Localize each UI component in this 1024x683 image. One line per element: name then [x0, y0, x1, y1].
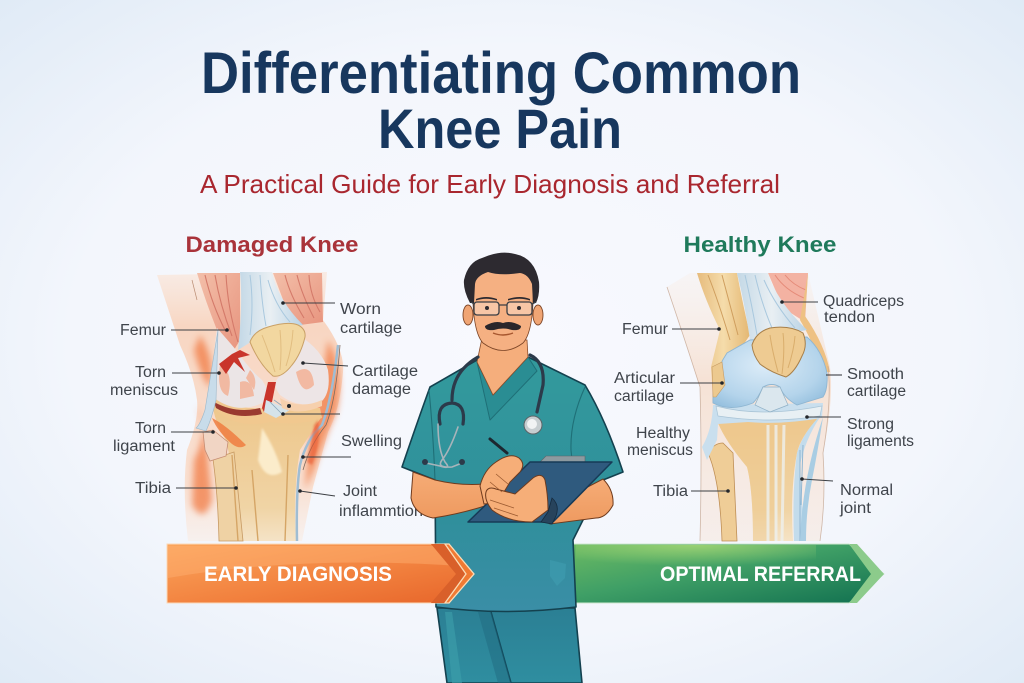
ears	[463, 305, 543, 325]
label: cartilage damage	[281, 361, 418, 416]
label: torn meniscus: meniscus	[110, 382, 178, 399]
label: tibia	[653, 483, 730, 500]
clipboard	[468, 456, 612, 522]
arrow: early diagnosis	[167, 544, 474, 603]
moustache	[485, 322, 521, 330]
label: smooth cartilage: cartilage	[847, 383, 906, 400]
label: torn ligament	[113, 420, 215, 455]
label: normal joint	[800, 477, 893, 517]
labels: damaged knee	[110, 301, 423, 520]
label: joint inflammation: inflammtion	[339, 503, 423, 520]
label: smooth cartilage	[826, 366, 906, 400]
label: joint inflammation: Joint	[343, 483, 378, 500]
pen	[490, 439, 507, 453]
label: cartilage damage: damage	[352, 381, 411, 398]
label: normal joint: Normal	[840, 482, 893, 499]
glasses	[471, 302, 536, 315]
label: healthy meniscus: meniscus	[627, 442, 693, 459]
label: worn cartilage: cartilage	[340, 320, 402, 337]
label: joint inflammation	[298, 483, 423, 520]
face	[473, 266, 533, 350]
label: swelling: Swelling	[341, 433, 402, 450]
label: articular cartilage: cartilage	[614, 388, 674, 405]
scrub top	[402, 357, 623, 612]
label: worn cartilage	[281, 301, 402, 337]
label: normal joint: joint	[839, 500, 872, 517]
holding hand	[486, 475, 548, 522]
label: femur	[120, 322, 229, 339]
label: femur: Femur	[120, 322, 166, 339]
right arm	[548, 479, 613, 524]
eyes and brows	[476, 297, 530, 310]
label: torn meniscus: Torn	[135, 364, 166, 381]
label: articular cartilage: Articular	[614, 370, 675, 387]
subtitle: A Practical Guide for Early Diagnosis and Referral	[200, 169, 780, 199]
label: healthy meniscus: Healthy	[636, 425, 690, 442]
label: femur: Femur	[622, 321, 668, 338]
left arm	[411, 472, 488, 518]
heading: healthy knee: Healthy Knee	[684, 232, 836, 257]
label: quadriceps tendon: Quadriceps	[823, 293, 904, 310]
title line 2: Knee Pain	[378, 97, 622, 160]
heading: damaged knee: Damaged Knee	[186, 232, 358, 257]
label: torn ligament: ligament	[113, 438, 176, 455]
title: Differentiating Common	[201, 41, 801, 106]
stethoscope	[422, 355, 543, 467]
label: smooth cartilage: Smooth	[847, 366, 904, 383]
mouth	[493, 333, 513, 335]
label: worn cartilage: Worn	[340, 301, 381, 318]
writing hand	[480, 456, 523, 504]
label: articular cartilage	[614, 370, 724, 405]
arrow text: OPTIMAL REFERRAL	[660, 563, 861, 586]
watch	[541, 498, 557, 524]
label: strong ligaments	[805, 415, 914, 450]
label: tibia: Tibia	[653, 483, 688, 500]
hand finger lines	[490, 474, 518, 516]
label: swelling	[301, 433, 402, 459]
label: torn meniscus	[110, 364, 221, 399]
hair	[464, 253, 539, 303]
label: healthy meniscus	[627, 425, 693, 459]
pants	[437, 608, 582, 683]
label: quadriceps tendon: tendon	[824, 309, 875, 326]
label: quadriceps tendon	[780, 293, 904, 326]
neck	[477, 338, 528, 395]
label: strong ligaments: Strong	[847, 416, 894, 433]
arrow: optimal referral	[570, 544, 884, 603]
label: strong ligaments: ligaments	[847, 433, 914, 450]
illustration: damaged knee	[157, 272, 343, 541]
label: femur	[622, 321, 721, 338]
label: torn ligament: Torn	[135, 420, 166, 437]
label: tibia	[135, 480, 238, 497]
label: tibia: Tibia	[135, 480, 171, 497]
arrow text: EARLY DIAGNOSIS	[204, 563, 392, 586]
label: cartilage damage: Cartilage	[352, 363, 418, 380]
labels: healthy knee	[614, 293, 914, 517]
illustration: doctor	[402, 253, 623, 683]
illustration: healthy knee	[667, 273, 831, 541]
